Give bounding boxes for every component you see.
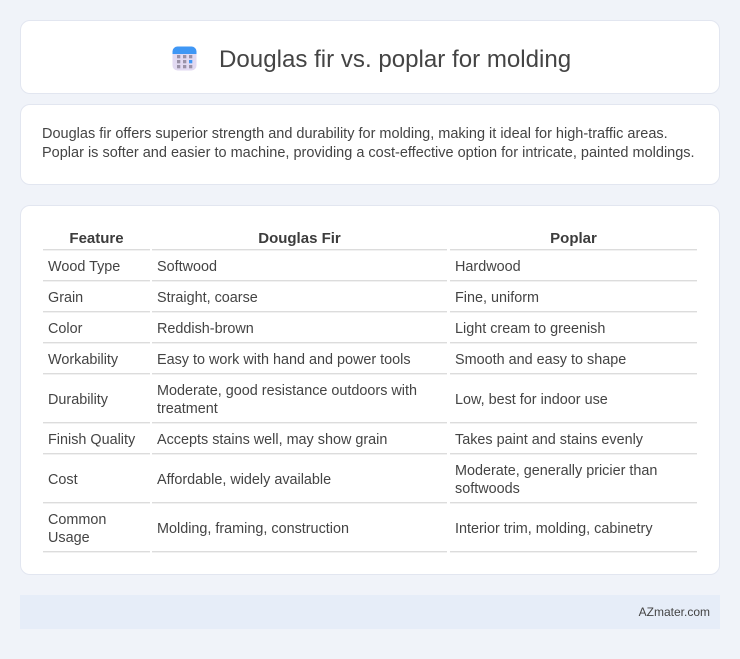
row: Grain: Grain: [48, 290, 83, 306]
comparison table: Smooth and easy to shape: [455, 352, 626, 368]
comparison table: Light cream to greenish: [455, 321, 605, 337]
comparison table: Molding, framing, construction: [157, 521, 349, 537]
comparison table: Takes paint and stains evenly: [455, 432, 643, 448]
row: Finish Quality: Finish Quality: [48, 432, 135, 448]
row: Wood Type: Wood Type: [48, 259, 120, 275]
comparison table: Accepts stains well, may show grain: [157, 432, 387, 448]
row: Durability: Durability: [48, 392, 108, 408]
row: Common Usage: Common: [48, 512, 106, 528]
footer brand: AZmater.com: [639, 605, 710, 619]
comparison table: Moderate, good resistance outdoors with: [157, 383, 417, 399]
comparison table: Fine, uniform: [455, 290, 539, 306]
row: Cost: Cost: [48, 472, 78, 488]
comparison table: Low, best for indoor use: [455, 392, 608, 408]
footer bar: [20, 595, 720, 629]
comparison table: treatment: [157, 401, 218, 417]
comparison table: Hardwood: [455, 259, 521, 275]
header: Feature: Feature: [69, 230, 124, 247]
comparison table: Interior trim, molding, cabinetry: [455, 521, 653, 537]
row: Common Usage: [48, 512, 106, 546]
summary card: [20, 104, 720, 185]
comparison table: Softwood: [157, 259, 217, 275]
comparison table: Moderate, generally pricier than: [455, 463, 657, 479]
row: Common Usage: Usage: [48, 530, 90, 546]
row: Workability: Workability: [48, 352, 118, 368]
title: Douglas fir vs. poplar for molding: [219, 46, 571, 73]
summary text: Poplar is softer and easier to machine, providing a cost-effective option for intricate, painted moldings.: [42, 145, 695, 161]
header: Douglas Fir: Douglas Fir: [258, 230, 341, 247]
comparison table card: [20, 205, 720, 575]
row: Color: Color: [48, 321, 82, 337]
comparison table: Straight, coarse: [157, 290, 258, 306]
summary text: [42, 126, 695, 161]
icon: calendar: [172, 46, 196, 70]
summary text: Douglas fir offers superior strength and durability for molding, making it ideal for high-traffic areas.: [42, 126, 668, 142]
title card: [20, 20, 720, 94]
comparison table: Reddish-brown: [157, 321, 254, 337]
header: Poplar: Poplar: [550, 230, 597, 247]
comparison table: softwoods: [455, 481, 520, 497]
comparison table: Affordable, widely available: [157, 472, 331, 488]
comparison table: Easy to work with hand and power tools: [157, 352, 411, 368]
